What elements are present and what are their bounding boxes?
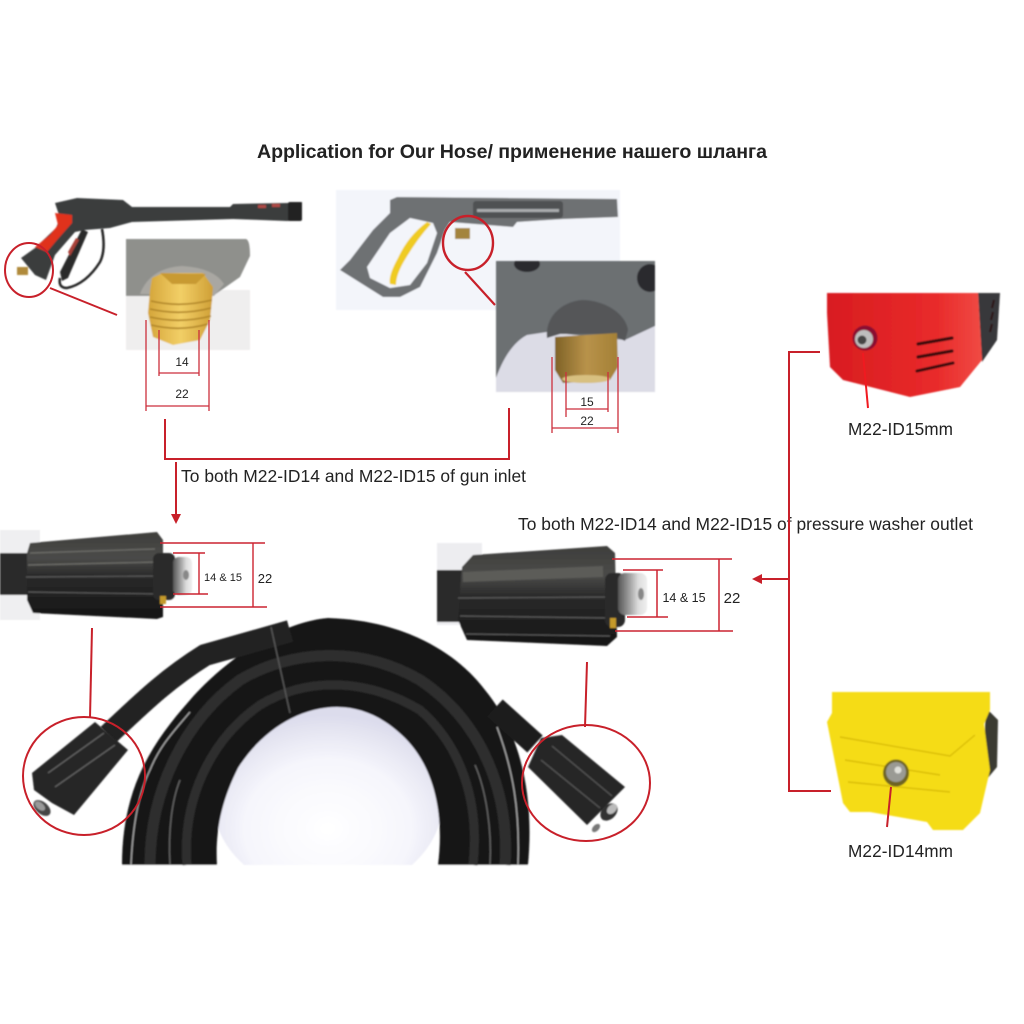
photo: red pressure washer [827, 293, 1000, 397]
bracket arrow: gun inlets to hose [165, 408, 509, 524]
photo: brass fitting with dimensions [126, 239, 250, 350]
callout circle: gun one inlet [5, 243, 53, 297]
pointer line: red washer port [863, 353, 868, 408]
dimension: 15 and 22 gun two: 22 [580, 414, 594, 428]
dimension: 15 and 22 gun two: 15 [580, 395, 594, 409]
dimension: 14 and 15, 22 left [160, 543, 272, 607]
connector line: gun one to detail [50, 288, 117, 315]
dimension: 14 and 15, 22 left: 22 [258, 571, 272, 586]
callout circle: gun two inlet [443, 216, 493, 270]
photo: grey spray gun [336, 190, 620, 310]
label: pressure washer outlet: To both M22-ID14 and M22-ID15 of pressure washer outlet [518, 514, 973, 534]
photo: left hose connector [0, 530, 192, 620]
photo: coiled hose [0, 618, 1024, 905]
label: M22-ID14mm: M22-ID14mm [848, 841, 953, 861]
pointer line: yellow washer port [887, 787, 891, 827]
title: Application for Our Hose/ применение нашего шланга [257, 141, 768, 163]
dimension: 14 and 15, 22 right: 14 & 15 [662, 591, 706, 605]
dimension: 15 and 22 gun two [552, 357, 618, 433]
connector line: left connector to circle [90, 628, 92, 718]
hose connector: bottom left nut [30, 722, 128, 819]
photo: yellow pressure washer [827, 692, 998, 830]
dimension: 14 and 15, 22 right [612, 559, 740, 631]
dimension: 14 and 15, 22 left: 14 & 15 [204, 572, 242, 584]
photo: grey gun fitting with dimensions [496, 256, 663, 392]
photo: black spray gun [17, 198, 302, 288]
callout circle: bottom right nut [522, 725, 650, 841]
hose connector: bottom right nut [528, 735, 625, 834]
label: gun inlet: To both M22-ID14 and M22-ID15 of gun inlet [181, 466, 526, 486]
callout circle: bottom left nut [23, 717, 145, 835]
label: M22-ID15mm: M22-ID15mm [848, 419, 953, 439]
bracket arrow: washer outlets to hose [752, 352, 831, 791]
dimension: 14 and 15, 22 right: 22 [724, 590, 740, 607]
connector line: right connector to circle [585, 662, 587, 727]
photo: right hose connector [437, 543, 647, 646]
connector line: gun two to detail [465, 272, 495, 305]
dimension: 14 and 22 gun one: 14 [175, 355, 189, 369]
dimension: 14 and 22 gun one [146, 320, 209, 411]
dimension: 14 and 22 gun one: 22 [175, 387, 189, 401]
